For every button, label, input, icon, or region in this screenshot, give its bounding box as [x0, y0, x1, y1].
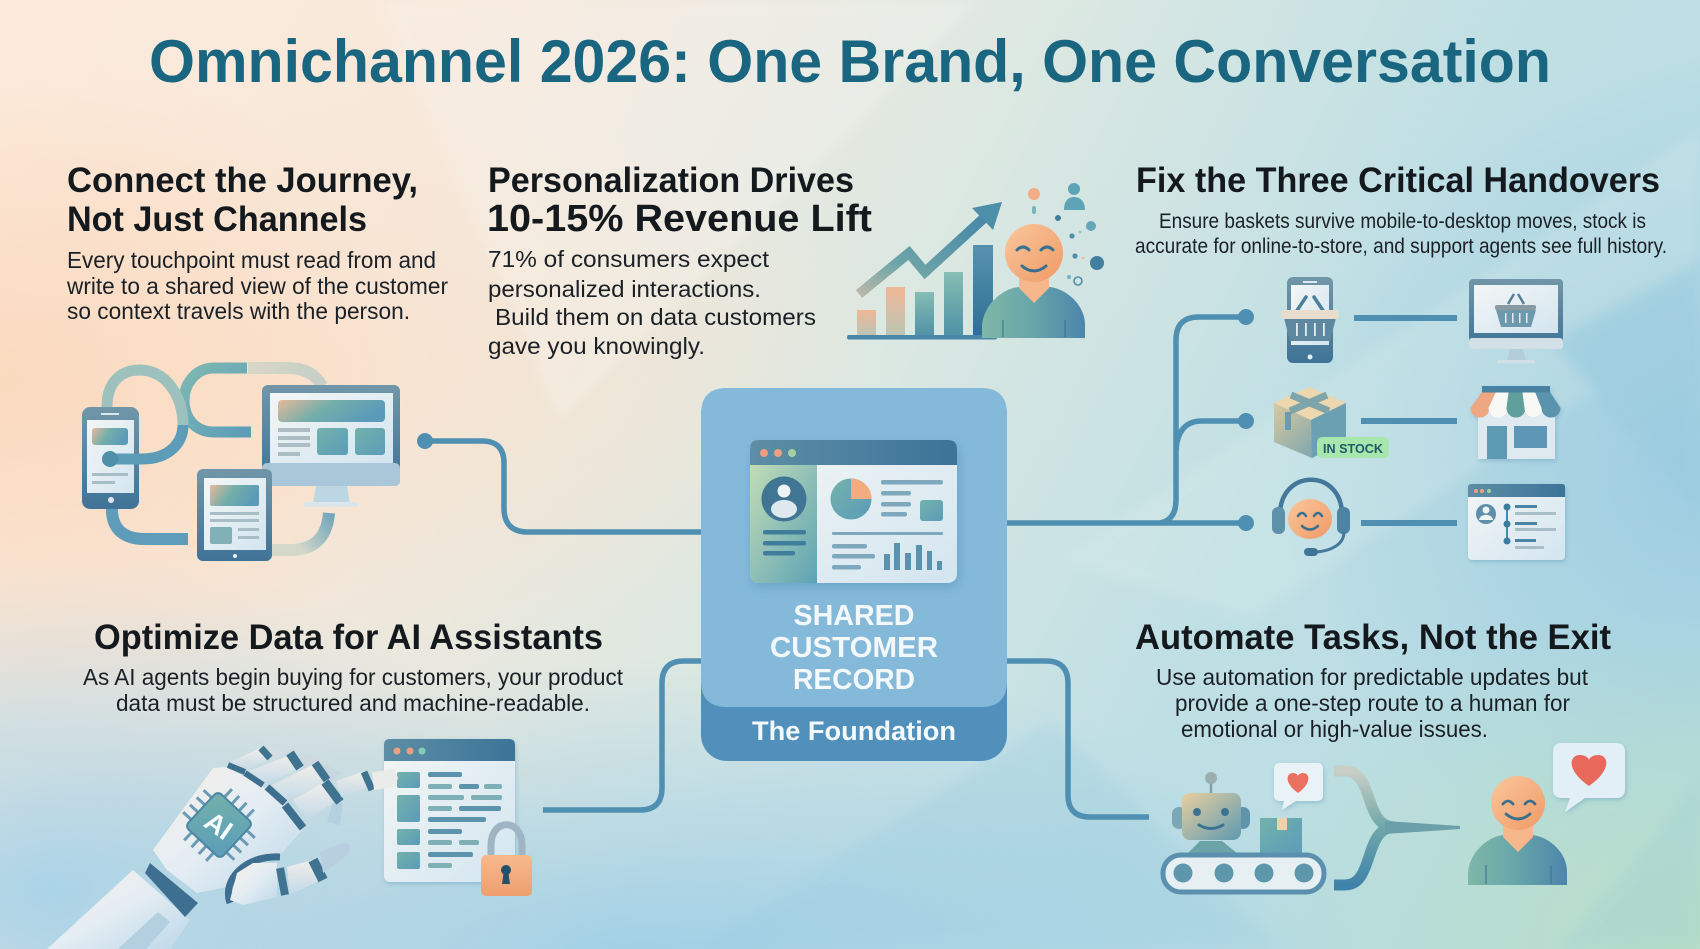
panel: personalization [487, 161, 1104, 359]
body text: provide a one-step route to a human for [1175, 690, 1570, 716]
body text: Every touchpoint must read from and [67, 247, 436, 273]
body text [1156, 664, 1589, 742]
body text: emotional or high-value issues. [1181, 716, 1488, 742]
connector: AI data to record [543, 661, 702, 810]
icon: stock box with badge [1274, 387, 1389, 458]
arrow: paths merging to human [1334, 771, 1460, 885]
connector: automate to record [1006, 661, 1149, 817]
label: shared customer record [770, 600, 938, 696]
heading line two: Not Just Channels [67, 200, 367, 239]
illustration: robot on conveyor [1163, 772, 1324, 892]
heading: automate tasks: Automate Tasks, Not the Exit [1135, 618, 1611, 657]
body text: Use automation for predictable updates but [1156, 664, 1589, 690]
body text [1135, 209, 1667, 258]
stat heading: revenue lift: 10-15% Revenue Lift [487, 198, 872, 240]
label: shared customer record: CUSTOMER [770, 632, 938, 664]
icon: smiling human agent [1468, 776, 1567, 885]
body text: gave you knowingly. [488, 333, 705, 359]
icon: customer record window [750, 440, 957, 583]
heading: optimize data: Optimize Data for AI Assistants [94, 618, 603, 657]
icon: phone with basket [1281, 277, 1339, 363]
label: the foundation: The Foundation [752, 716, 956, 746]
icon: padlock [481, 825, 532, 896]
body text [83, 664, 624, 716]
badge text: in stock: IN STOCK [1323, 441, 1384, 456]
icon: AI chip: AI [199, 806, 238, 846]
title: Omnichannel 2026: One Brand, One Conversation [149, 28, 1551, 95]
icon: customer history window [1468, 484, 1565, 560]
bar chart with rising arrow [847, 202, 1002, 340]
panel: three critical handovers [1135, 161, 1667, 560]
panel: connect the journey [66, 161, 448, 561]
body text: write to a shared view of the customer [66, 273, 448, 299]
icon: large heart bubble [1553, 743, 1625, 812]
body text: 71% of consumers expect [488, 246, 770, 272]
body text: Ensure baskets survive mobile-to-desktop moves, stock is [1159, 209, 1646, 233]
illustration: robot hand [47, 745, 398, 949]
panel: shared customer record [701, 388, 1007, 761]
heading: handovers: Fix the Three Critical Handovers [1136, 161, 1660, 200]
body text: data must be structured and machine-readable. [116, 690, 590, 716]
heading: personalization: Personalization Drives [488, 161, 854, 200]
icon: store [1471, 386, 1560, 459]
body text: personalized interactions. [488, 276, 761, 302]
icon: support agent headset [1272, 480, 1350, 556]
icon: small heart bubble [1274, 763, 1323, 810]
icon: AI chip [170, 776, 268, 874]
body text [66, 247, 448, 324]
handover links [1354, 315, 1457, 526]
connector: handovers branch [1006, 309, 1254, 531]
panel: optimize data for AI [47, 618, 624, 949]
illustration: product data window [384, 739, 515, 882]
heading: connect the journey: Connect the Journey, [67, 161, 418, 200]
body text [488, 246, 816, 359]
body text: As AI agents begin buying for customers, your product [83, 664, 624, 690]
panel: automate tasks [1135, 618, 1625, 892]
connector: journey to record [417, 433, 702, 532]
body text: Build them on data customers [495, 304, 816, 330]
label: shared customer record: RECORD [793, 664, 915, 696]
icon: desktop with basket [1469, 279, 1563, 363]
body text: so context travels with the person. [67, 298, 410, 324]
label: shared customer record: SHARED [794, 600, 914, 632]
icon: connected devices [82, 368, 400, 561]
soft background light rays [380, 0, 1700, 949]
icon: smiling person with data dots [982, 183, 1104, 338]
